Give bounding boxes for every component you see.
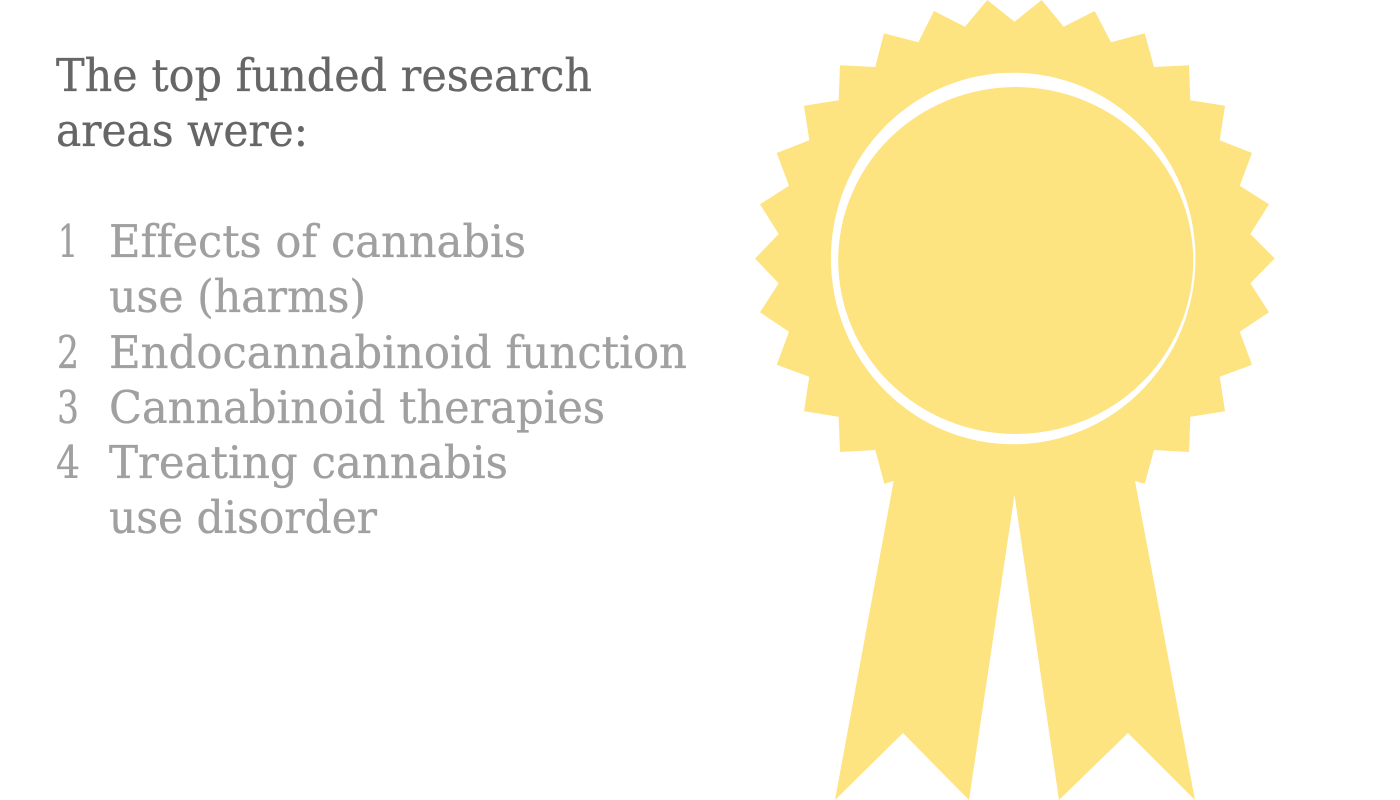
ranked list of research areas bbox=[56, 217, 687, 544]
list item 1 bbox=[58, 217, 526, 323]
list item 4: use disorder bbox=[109, 493, 378, 544]
heading bbox=[56, 51, 592, 157]
rosette ribbon tails bbox=[835, 440, 1195, 800]
heading: areas were: bbox=[56, 106, 308, 157]
list item 2: 2 bbox=[57, 328, 79, 379]
heading: The top funded research bbox=[56, 51, 592, 102]
list item 3: 3 bbox=[57, 383, 79, 434]
list item 1: use (harms) bbox=[109, 272, 366, 323]
list item 2: Endocannabinoid function bbox=[109, 328, 687, 379]
icon: award rosette bbox=[755, 0, 1275, 800]
list item 4: 4 bbox=[56, 438, 80, 489]
list item 1: 1 bbox=[58, 217, 78, 268]
list item 1: Effects of cannabis bbox=[109, 217, 526, 268]
list item 4 bbox=[56, 438, 508, 544]
rosette centre disc bbox=[838, 87, 1193, 434]
list item 3: Cannabinoid therapies bbox=[109, 383, 605, 434]
list item 4: Treating cannabis bbox=[109, 438, 508, 489]
rosette starburst bbox=[755, 0, 1275, 484]
rosette white ring bbox=[831, 73, 1196, 444]
